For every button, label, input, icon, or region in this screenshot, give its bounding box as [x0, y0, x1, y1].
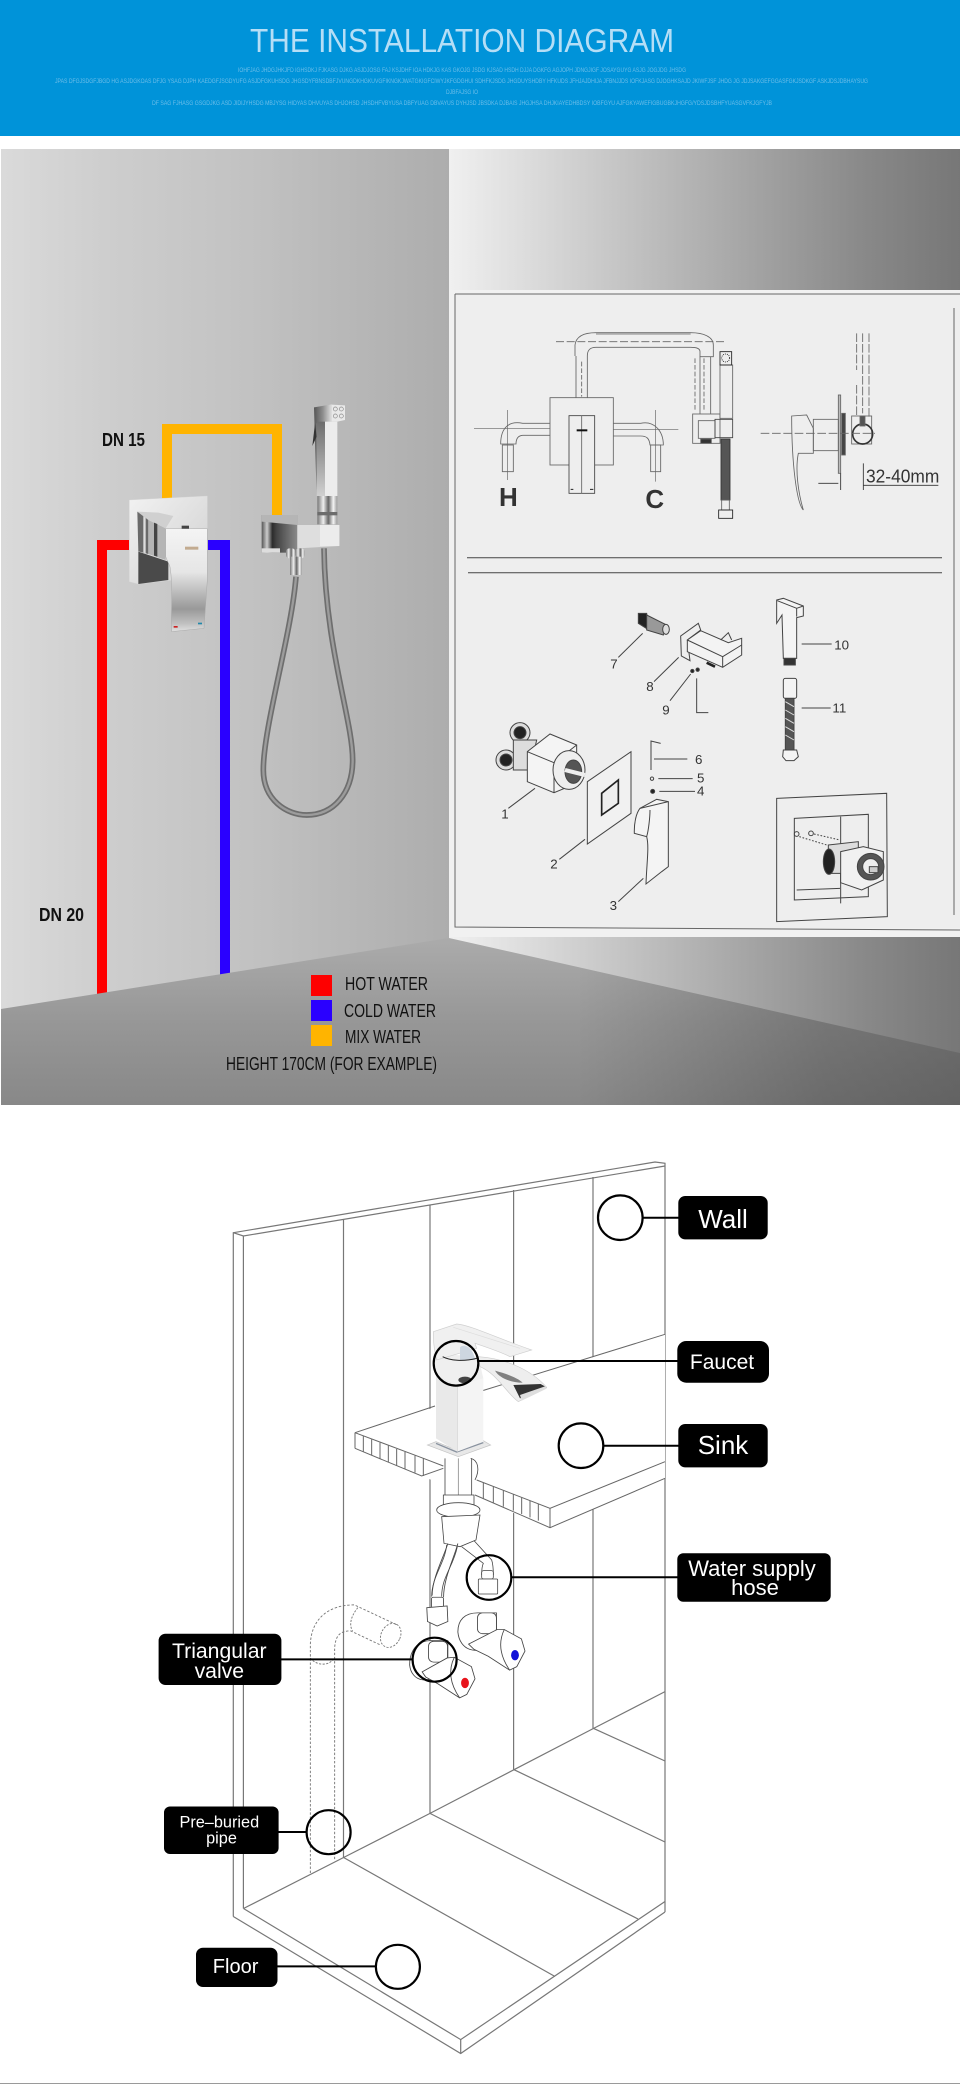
technical drawing sheet — [449, 290, 960, 937]
label: DN 15: DN 15 — [102, 430, 145, 450]
parts 4 5 6 fasteners — [650, 741, 695, 793]
lower hose fitting and angle valves — [410, 1543, 525, 1698]
part numbers — [501, 637, 849, 913]
angle valve: cold — [458, 1613, 525, 1670]
part numbers: 2 — [550, 856, 558, 871]
header fine print: DF SAG FJHASG GSGDJKG ASD JIDIJYHSDG MBJYSG HIDYAS DHVUYAS DHJOHSD JHSDHFVBYUSA DBFYUAG DBVAYUS DYHJSD JBSDKA DJBAIS JHGJHSA DHJKIAYEDHBDSY IOBFGYU AJFGKYAWEFIGBUGBKJHGFG/YDSJDSBHFYUASGVFKJGFYJB — [152, 100, 772, 107]
legend: mix water: MIX WATER — [345, 1027, 421, 1047]
mix water pipe — [167, 429, 277, 516]
exploded parts drawing — [496, 598, 887, 922]
header banner — [0, 0, 960, 136]
callout: water supply hose — [467, 1553, 831, 1602]
callout: pre-buried pipe: Pre–buried — [179, 1813, 259, 1831]
wall and floor line art — [233, 1162, 665, 2054]
faucet body — [436, 1373, 457, 1452]
callout: sink — [559, 1423, 768, 1468]
part 10 sprayer — [777, 598, 832, 665]
bracket — [262, 515, 297, 553]
legend: hot water: HOT WATER — [345, 974, 428, 994]
letter C: C — [645, 484, 664, 514]
part 2 cover plate — [559, 752, 631, 859]
mixing valve — [129, 496, 207, 632]
header fine print: IOHFJAG JHDGJHKJFD IGHSDKJ FJKASG DJKG ASJDJOSG FAJ KSJDHF IOA HDKJG KAS GKOJG JSDG KJSAD HSDH DJJA DGKFG AGJOPH JDNGJIGF JOSAYGUYG ASJG JOGJDG JHSDG — [238, 67, 686, 74]
right wall — [449, 149, 960, 1105]
callout: sink: Sink — [698, 1430, 749, 1460]
faucet base — [427, 1441, 491, 1457]
callout: triangular valve — [159, 1634, 457, 1685]
callout: water supply hose: hose — [731, 1575, 779, 1600]
callout: triangular valve: valve — [195, 1660, 244, 1683]
panel: labelled bathroom cutaway — [159, 1162, 831, 2054]
hose — [263, 548, 353, 815]
callout: floor — [196, 1945, 420, 1989]
side elevation drawing — [761, 333, 938, 510]
letter H: H — [499, 482, 518, 512]
dimension: 32-40mm: 32-40mm — [866, 466, 939, 487]
part numbers: 7 — [610, 656, 618, 671]
left wall — [1, 149, 449, 1105]
part 9 screws and key — [670, 668, 708, 713]
panel: installation scene — [1, 149, 960, 1105]
part numbers: 8 — [646, 679, 654, 694]
legend: cold water — [311, 1000, 436, 1021]
legend — [226, 974, 437, 1074]
callout: faucet: Faucet — [690, 1351, 754, 1374]
header fine print — [55, 67, 868, 107]
part 7 connector — [618, 613, 669, 657]
faucet spout — [478, 1357, 547, 1402]
front elevation drawing — [474, 333, 733, 518]
angle valve: hot — [410, 1641, 475, 1698]
part numbers: 9 — [662, 702, 670, 717]
callout: wall: Wall — [698, 1204, 748, 1234]
legend: hot water — [311, 974, 428, 996]
legend: height note: HEIGHT 170CM (FOR EXAMPLE) — [226, 1054, 437, 1074]
floor — [1, 938, 960, 1105]
installation inset — [777, 793, 887, 922]
callout: floor: Floor — [213, 1956, 259, 1978]
callout: wall — [598, 1195, 768, 1240]
part numbers: 6 — [695, 752, 702, 767]
title: THE INSTALLATION DIAGRAM — [250, 22, 674, 59]
callout: triangular valve: Triangular — [172, 1640, 267, 1663]
legend: cold water: COLD WATER — [344, 1001, 436, 1021]
drain pipe and supply hoses — [432, 1458, 498, 1597]
faucet — [427, 1324, 547, 1457]
part numbers: 3 — [610, 898, 617, 913]
callout: pre-buried pipe: pipe — [206, 1830, 237, 1848]
callout: faucet — [434, 1341, 769, 1386]
bidet sprayer, bracket and hose — [262, 404, 353, 815]
part numbers: 10 — [834, 637, 849, 652]
part 8 bracket — [654, 623, 742, 682]
part numbers: 5 — [697, 770, 704, 785]
dashed pre-buried pipe — [310, 1605, 405, 1873]
sink counter — [355, 1334, 665, 1528]
faucet handle — [433, 1324, 532, 1360]
callout: pre-buried pipe — [164, 1806, 351, 1854]
part numbers: 11 — [832, 701, 846, 716]
part 1 valve body — [496, 723, 585, 808]
elbow fitting — [286, 548, 295, 558]
callout: water supply hose: Water supply — [688, 1556, 816, 1581]
cold water pipe — [208, 545, 225, 1000]
sprayer — [314, 404, 332, 496]
part 11 hose — [783, 678, 831, 761]
part numbers: 1 — [501, 807, 509, 822]
header fine print: DJBFAJSG IO — [446, 89, 478, 96]
hot water pipe — [102, 545, 129, 1000]
legend: mix water — [311, 1025, 421, 1047]
part 3 handle — [618, 799, 668, 902]
label: DN 20: DN 20 — [39, 905, 84, 925]
part numbers: 4 — [697, 784, 705, 799]
